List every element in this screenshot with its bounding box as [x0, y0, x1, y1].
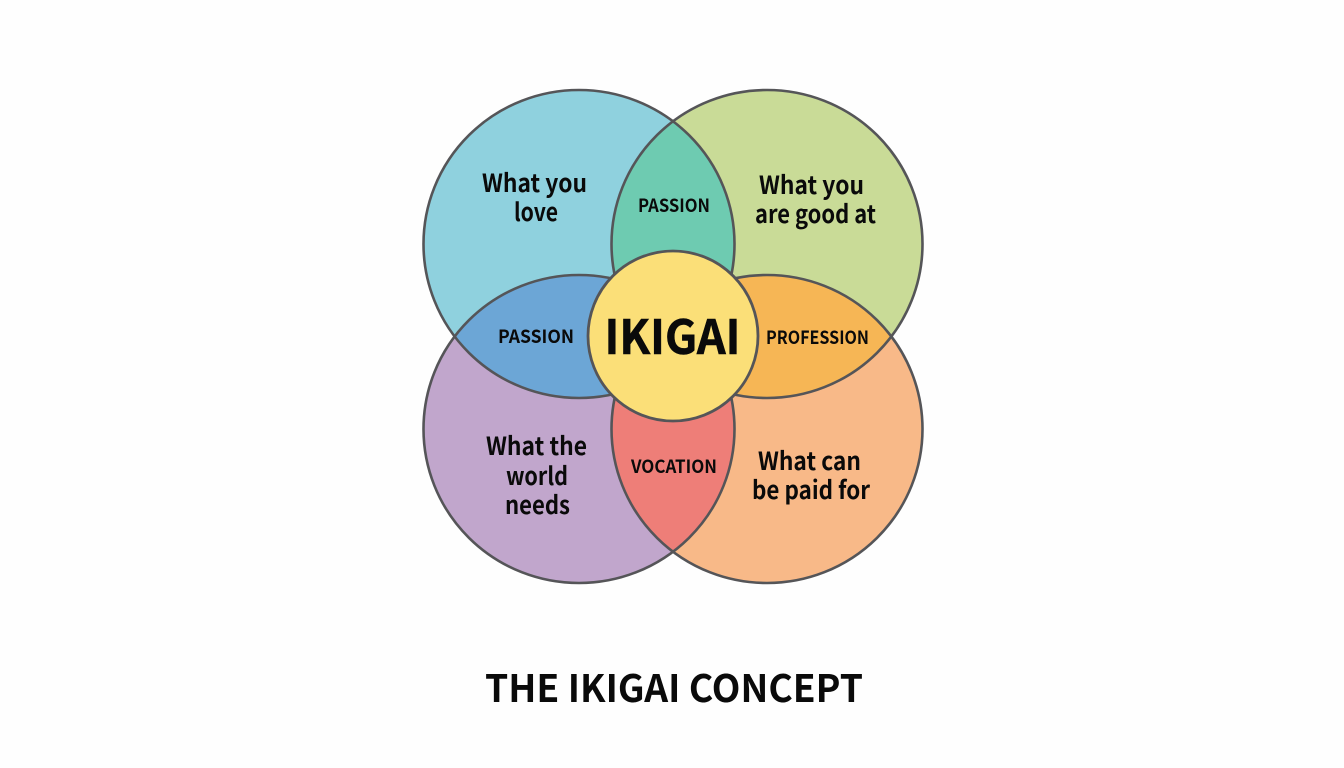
label: what can be paid for: What can	[758, 442, 861, 478]
label: what you are good at: are good at	[755, 195, 876, 231]
center circle: ikigai	[588, 251, 758, 421]
label: what you love: What you	[482, 164, 587, 200]
label: what you are good at	[755, 166, 876, 231]
circle outlines	[424, 90, 922, 583]
label: what the world needs: What the	[486, 427, 587, 463]
overlap: right profession	[737, 276, 890, 397]
circle: what can be paid for	[612, 275, 922, 583]
label: ikigai center: IKIGAI	[604, 299, 740, 368]
label: profession: PROFESSION	[766, 324, 869, 350]
label: what you are good at: What you	[759, 166, 864, 202]
overlap: left passion	[456, 276, 609, 397]
circle: what you are good at	[612, 90, 922, 398]
title: THE IKIGAI CONCEPT	[485, 658, 863, 713]
label: what can be paid for	[752, 442, 870, 507]
label: what the world needs: needs	[505, 486, 570, 522]
label: what the world needs: world	[506, 457, 568, 493]
label: what you love: love	[514, 193, 558, 229]
label: vocation: VOCATION	[630, 453, 717, 479]
label: left passion: PASSION	[498, 323, 574, 349]
circle: what you love	[424, 90, 734, 398]
label: what the world needs	[486, 427, 587, 522]
overlap: bottom vocation	[612, 400, 734, 550]
label: what you love	[482, 164, 587, 229]
circle: what the world needs	[424, 275, 734, 583]
label: what can be paid for: be paid for	[752, 471, 870, 507]
label: top passion: PASSION	[638, 192, 710, 218]
overlap: top passion	[612, 123, 734, 272]
ikigai venn diagram	[424, 90, 922, 583]
